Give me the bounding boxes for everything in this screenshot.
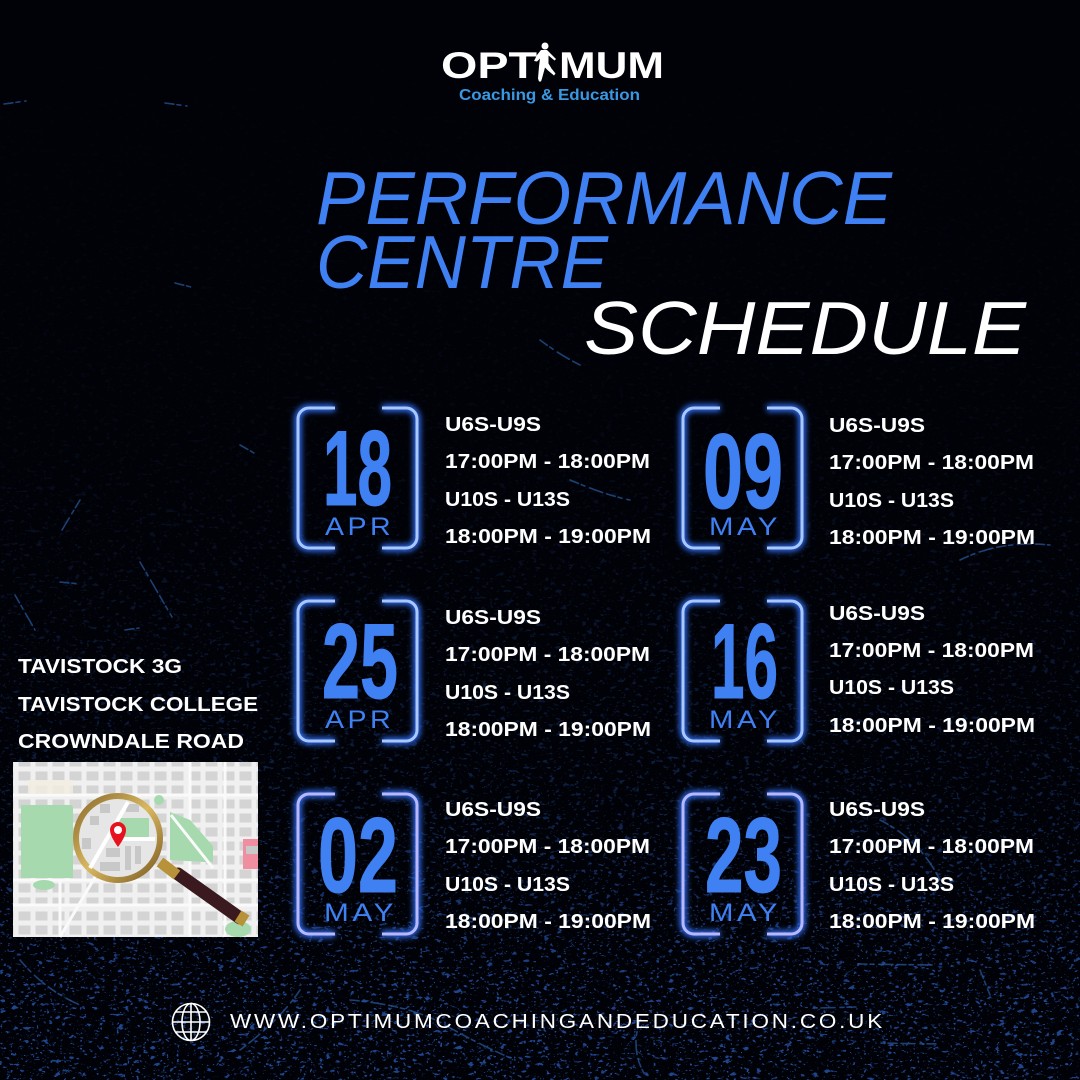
session times: 09 May: U6S-U9S xyxy=(829,415,925,437)
session times: 23 May: 18:00PM - 19:00PM xyxy=(829,911,1035,933)
date card: 16 May xyxy=(683,601,802,741)
session times: 23 May: U10S - U13S xyxy=(829,874,954,896)
venue address: CROWNDALE ROAD xyxy=(18,731,244,753)
session times: 09 May xyxy=(829,415,1035,549)
date card: 25 April: APR xyxy=(325,706,394,734)
session times: 16 May: U10S - U13S xyxy=(829,677,954,699)
session times: 25 April: 18:00PM - 19:00PM xyxy=(445,719,651,741)
date card: 25 April: 25 xyxy=(322,601,398,721)
date card: 09 May: 09 xyxy=(703,411,783,531)
venue address: TAVISTOCK COLLEGE xyxy=(18,694,258,716)
session times: 23 May xyxy=(829,799,1035,933)
date card: 09 May: MAY xyxy=(709,513,781,541)
title: SCHEDULE xyxy=(584,286,1027,370)
session times: 18 April xyxy=(445,414,651,548)
date card: 16 May: 16 xyxy=(711,601,778,721)
venue address: TAVISTOCK 3G xyxy=(18,656,182,678)
logo: MUM xyxy=(559,45,664,86)
date card: 02 May: MAY xyxy=(324,899,397,927)
session times: 16 May: U6S-U9S xyxy=(829,603,925,625)
logo xyxy=(441,42,664,104)
session times: 02 May: 18:00PM - 19:00PM xyxy=(445,911,651,933)
date card: 23 May: 23 xyxy=(705,795,782,915)
date card: 18 April: 18 xyxy=(323,408,392,528)
date card: 09 May xyxy=(683,408,802,548)
title: PERFORMANCE xyxy=(316,156,893,240)
title: CENTRE xyxy=(316,220,609,304)
session times: 02 May xyxy=(445,799,651,933)
logo: Coaching & Education xyxy=(459,87,640,104)
icon: red map pin xyxy=(110,822,126,847)
session times: 16 May: 18:00PM - 19:00PM xyxy=(829,715,1035,737)
date card: 02 May: 02 xyxy=(318,795,398,915)
session times: 16 May: 17:00PM - 18:00PM xyxy=(829,640,1034,662)
session times: 02 May: 17:00PM - 18:00PM xyxy=(445,836,650,858)
location map with magnifier xyxy=(13,762,258,937)
session times: 25 April xyxy=(445,607,651,741)
session times: 18 April: U10S - U13S xyxy=(445,489,570,511)
session times: 25 April: U6S-U9S xyxy=(445,607,541,629)
icon: globe xyxy=(172,1004,210,1040)
title xyxy=(316,156,1027,370)
date card: 23 May xyxy=(683,794,802,934)
session times: 18 April: U6S-U9S xyxy=(445,414,541,436)
session times: 23 May: U6S-U9S xyxy=(829,799,925,821)
session times: 16 May xyxy=(829,603,1035,737)
icon: runner in logo xyxy=(534,42,556,82)
logo: OPT xyxy=(441,45,537,86)
session times: 09 May: U10S - U13S xyxy=(829,490,954,512)
session times: 02 May: U6S-U9S xyxy=(445,799,541,821)
session times: 02 May: U10S - U13S xyxy=(445,874,570,896)
website address: WWW.OPTIMUMCOACHINGANDEDUCATION.CO.UK xyxy=(230,1011,885,1033)
session times: 18 April: 17:00PM - 18:00PM xyxy=(445,451,650,473)
date card: 16 May: MAY xyxy=(709,706,781,734)
date card: 18 April: APR xyxy=(325,513,394,541)
session times: 25 April: U10S - U13S xyxy=(445,682,570,704)
date card: 18 April xyxy=(298,408,417,548)
date card: 02 May xyxy=(298,794,417,934)
session times: 18 April: 18:00PM - 19:00PM xyxy=(445,526,651,548)
session times: 09 May: 18:00PM - 19:00PM xyxy=(829,527,1035,549)
venue address xyxy=(18,656,258,753)
date card: 25 April xyxy=(298,601,417,741)
session times: 09 May: 17:00PM - 18:00PM xyxy=(829,452,1034,474)
icon: magnifying glass xyxy=(76,796,246,921)
session times: 23 May: 17:00PM - 18:00PM xyxy=(829,836,1034,858)
session times: 25 April: 17:00PM - 18:00PM xyxy=(445,644,650,666)
date card: 23 May: MAY xyxy=(709,899,781,927)
